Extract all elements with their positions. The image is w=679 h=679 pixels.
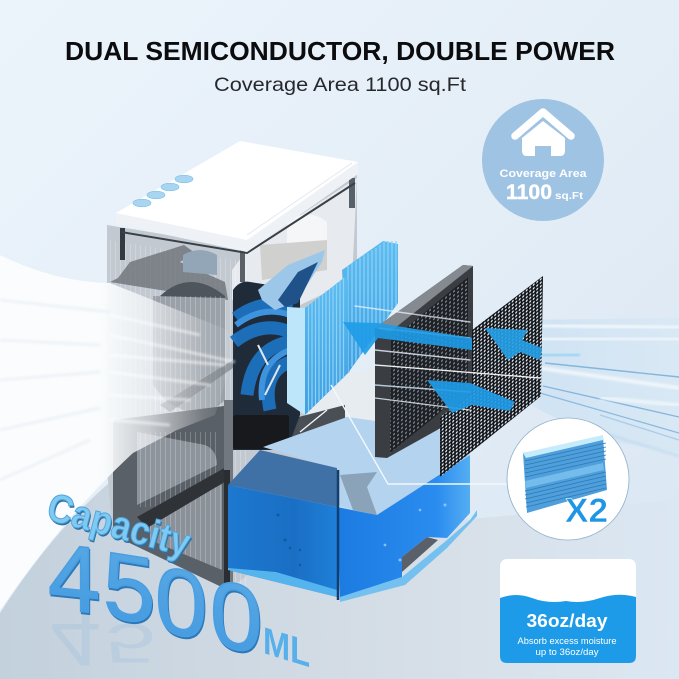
arrow: airflow lower	[427, 380, 515, 413]
floor	[0, 470, 679, 679]
card blue wave	[500, 595, 636, 663]
fin block rear	[342, 241, 398, 373]
body: right side panel	[232, 178, 357, 310]
fan top dark shards	[278, 262, 318, 307]
lid buttons	[133, 175, 193, 207]
support post left	[120, 228, 125, 260]
filter mesh	[390, 277, 468, 453]
fin block rear slats	[348, 241, 396, 373]
arrow: airflow upper	[343, 322, 472, 355]
subtitle: Coverage Area 1100 sq.Ft	[214, 74, 467, 96]
reflections of digits: 4	[50, 595, 101, 679]
digits depth: 4	[49, 525, 101, 635]
body: lower rib lines	[137, 432, 217, 507]
body: shelf arc	[160, 282, 225, 306]
lid side	[116, 162, 358, 252]
body: grey pillar	[224, 400, 233, 590]
tank notch	[402, 537, 438, 572]
card: daily moisture	[500, 559, 636, 663]
body: lower dark shell	[113, 405, 232, 592]
card description line 2: up to 36oz/day	[536, 647, 599, 658]
body: dark pillar lower	[224, 470, 230, 590]
floating mesh filter	[440, 276, 543, 477]
lid groove	[247, 163, 352, 235]
filter frame top bevel	[375, 265, 473, 332]
dark block below fins	[287, 405, 345, 450]
connector line short	[300, 410, 327, 432]
x2 label: X2	[565, 492, 608, 530]
capacity shadow: Capacity	[44, 487, 197, 568]
capacity word: Capacity	[43, 485, 196, 566]
digit 0 second: 0	[210, 559, 262, 676]
tank base lip	[228, 568, 337, 597]
fin block front panel	[287, 307, 305, 415]
badge value: 1100	[506, 180, 552, 204]
water tank	[228, 417, 477, 602]
arrow: airflow right	[485, 328, 542, 360]
fan blade white	[258, 345, 280, 395]
tank inner grey recess	[340, 472, 377, 515]
fin illustration lines	[525, 443, 606, 507]
body: second rib lines	[150, 484, 222, 570]
card white top	[500, 559, 636, 663]
card value: 36oz/day	[526, 611, 608, 631]
tank right blue face	[337, 455, 470, 600]
reflections of digits: 5	[105, 612, 156, 673]
left airflow wind	[0, 250, 240, 625]
fin block front slats	[308, 278, 344, 412]
body: vertical ribs	[107, 240, 247, 590]
right airflow streaks	[520, 318, 679, 456]
body: lower ribs	[137, 432, 217, 505]
body: right white cylinder	[287, 214, 327, 245]
body: upper shelf dark	[110, 245, 228, 300]
tank upper darker recess	[228, 450, 337, 507]
digit 4: 4	[48, 523, 100, 633]
tank top pale	[263, 417, 470, 515]
body: dark diagonal brace	[137, 466, 228, 528]
tank front blue face	[228, 485, 337, 597]
body: mid divider	[160, 360, 233, 412]
digits depth: 0	[211, 561, 263, 678]
body: back translucent shell	[107, 172, 357, 590]
support post front	[240, 250, 245, 282]
fan base	[233, 415, 289, 449]
tank water specks	[276, 514, 301, 566]
badge: coverage area	[482, 99, 604, 221]
unit ML: ML	[263, 620, 310, 676]
body: cylinder ribs	[153, 296, 225, 411]
digits depth	[49, 525, 263, 678]
fin illustration	[523, 437, 607, 513]
wind wedge	[0, 250, 240, 625]
fan housing	[233, 282, 300, 450]
frame filter	[375, 265, 473, 458]
lid underside rail	[121, 183, 355, 253]
body: right beige block	[260, 240, 327, 280]
gap behind fins	[305, 370, 375, 457]
lid top	[116, 141, 358, 240]
callout circle	[507, 418, 629, 540]
connector line to fin callout	[331, 385, 507, 484]
fan blade highlight	[236, 312, 290, 400]
semiconductor fins	[287, 241, 398, 415]
fan blades	[234, 305, 292, 410]
body: blue grey cylinder	[183, 250, 217, 275]
fan top shards	[258, 250, 325, 310]
card description line 1: Absorb excess moisture	[518, 636, 616, 647]
icon: house	[515, 112, 571, 156]
body: second rib panel	[150, 484, 222, 570]
tank edge	[337, 470, 339, 600]
fan	[233, 250, 325, 450]
body: grey cylinder	[153, 296, 225, 412]
filter frame	[375, 265, 473, 458]
airflow lines	[355, 306, 540, 410]
dehumidifier unit	[107, 141, 477, 602]
digits depth: 0	[156, 548, 208, 663]
wind streaks white	[110, 315, 235, 425]
support post right	[349, 178, 355, 208]
fin block front	[305, 277, 348, 415]
wind streaks soft blue	[0, 300, 110, 480]
fin illustration top edge	[523, 435, 603, 458]
badge label: Coverage Area	[500, 168, 588, 180]
digit 0 first: 0	[155, 546, 207, 661]
digit 5: 5	[103, 532, 155, 645]
capacity 3D label	[43, 485, 310, 679]
badge unit: sq.Ft	[555, 191, 584, 202]
fin illustration middle band	[525, 463, 604, 488]
title: DUAL SEMICONDUCTOR, DOUBLE POWER	[65, 38, 615, 66]
callout: fins x2	[507, 418, 629, 540]
reflections of digits	[50, 595, 156, 679]
digits depth: 5	[104, 534, 156, 647]
tank right lip	[340, 510, 477, 602]
